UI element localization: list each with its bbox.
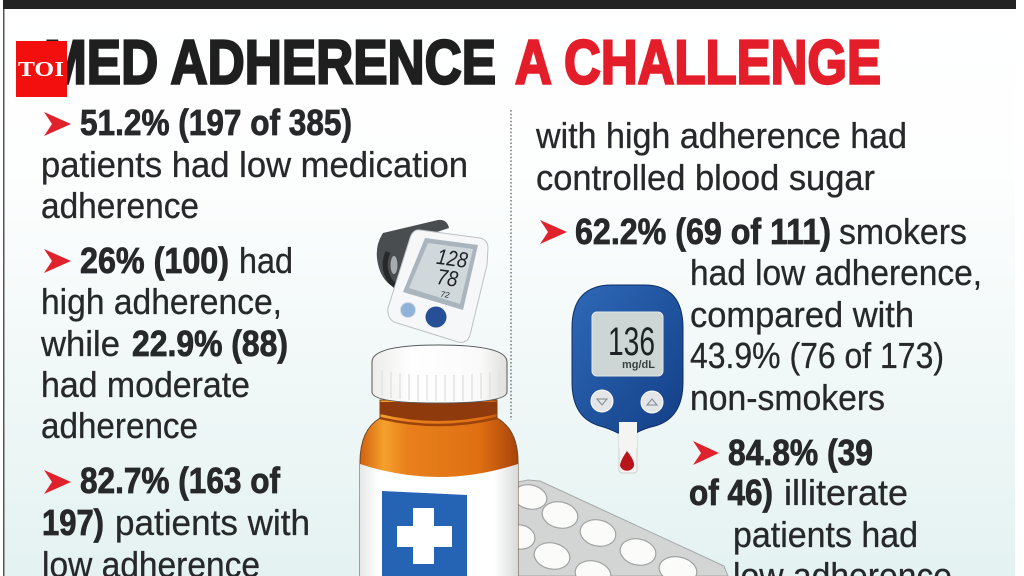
bullet: 84.8% illiterate [689,432,952,576]
TOI logo [16,41,67,97]
continuation: controlled blood sugar [535,115,907,198]
bullet: 84.8% illiterate: patients had [733,514,918,555]
monitor readings: 72 [440,290,451,300]
glucose reading: mg/dL [622,359,655,371]
bullet: 82.7% patients [42,460,310,576]
glucose reading [608,320,655,371]
blue medical cross label [382,491,467,576]
glucose reading: 136 [608,320,655,364]
bullet: 51.2% low adherence [41,102,468,226]
bullet: 62.2% smokers: non-smokers [690,377,885,418]
bullet: 26% high adherence: had [239,240,293,281]
bullet: 84.8% illiterate: of 46) [689,472,773,513]
monitor readings: 78 [435,264,460,292]
continuation: controlled blood sugar: with high adherence had [535,115,907,156]
title [44,28,881,98]
bullet: 82.7% patients: patients with [115,502,310,543]
icon: blood pressure monitor [377,220,488,342]
bullet: 62.2% smokers: had low adherence, [690,252,982,293]
left column text [40,102,468,576]
icon: blister pack [503,480,728,576]
bullet: 62.2% smokers: 62.2% (69 of 111) [575,211,831,252]
bullet: 26% high adherence: while [40,323,120,364]
bottle cap [372,345,507,403]
title: A CHALLENGE [515,28,881,98]
bullet: 62.2% smokers [540,211,982,418]
bullet: 51.2% low adherence: patients had low medication [41,144,468,185]
bullet: 26% high adherence: high adherence, [41,281,282,322]
right column text [535,115,982,576]
bullet: 51.2% low adherence: adherence [41,185,199,226]
icon: medicine bottle [360,345,518,576]
bullet: 26% high adherence: 22.9% (88) [132,323,288,364]
bullet: 26% high adherence: adherence [41,405,198,446]
bullet: 26% high adherence: had moderate [41,364,250,405]
bullet: 51.2% low adherence: 51.2% (197 of 385) [80,102,352,143]
bullet: 62.2% smokers: 43.9% (76 of 173) [690,335,944,376]
bullet: 62.2% smokers: compared with [690,294,914,335]
bullet: 82.7% patients: 197) [42,502,104,543]
bullet: 84.8% illiterate: 84.8% (39 [728,432,873,473]
title: MED ADHERENCE [44,28,496,98]
bullet: 26% high adherence: 26% (100) [80,240,229,281]
continuation: controlled blood sugar: controlled blood sugar [536,157,875,198]
monitor readings [431,244,470,302]
TOI logo: TOI [18,57,64,81]
bullet: 62.2% smokers: smokers [839,211,967,252]
bullet: 82.7% patients: 82.7% (163 of [80,460,281,501]
bullet: 26% high adherence [40,240,293,446]
monitor readings: 128 [435,244,470,273]
bullet: 84.8% illiterate: illiterate [784,472,908,513]
icon: glucose meter [572,285,683,473]
